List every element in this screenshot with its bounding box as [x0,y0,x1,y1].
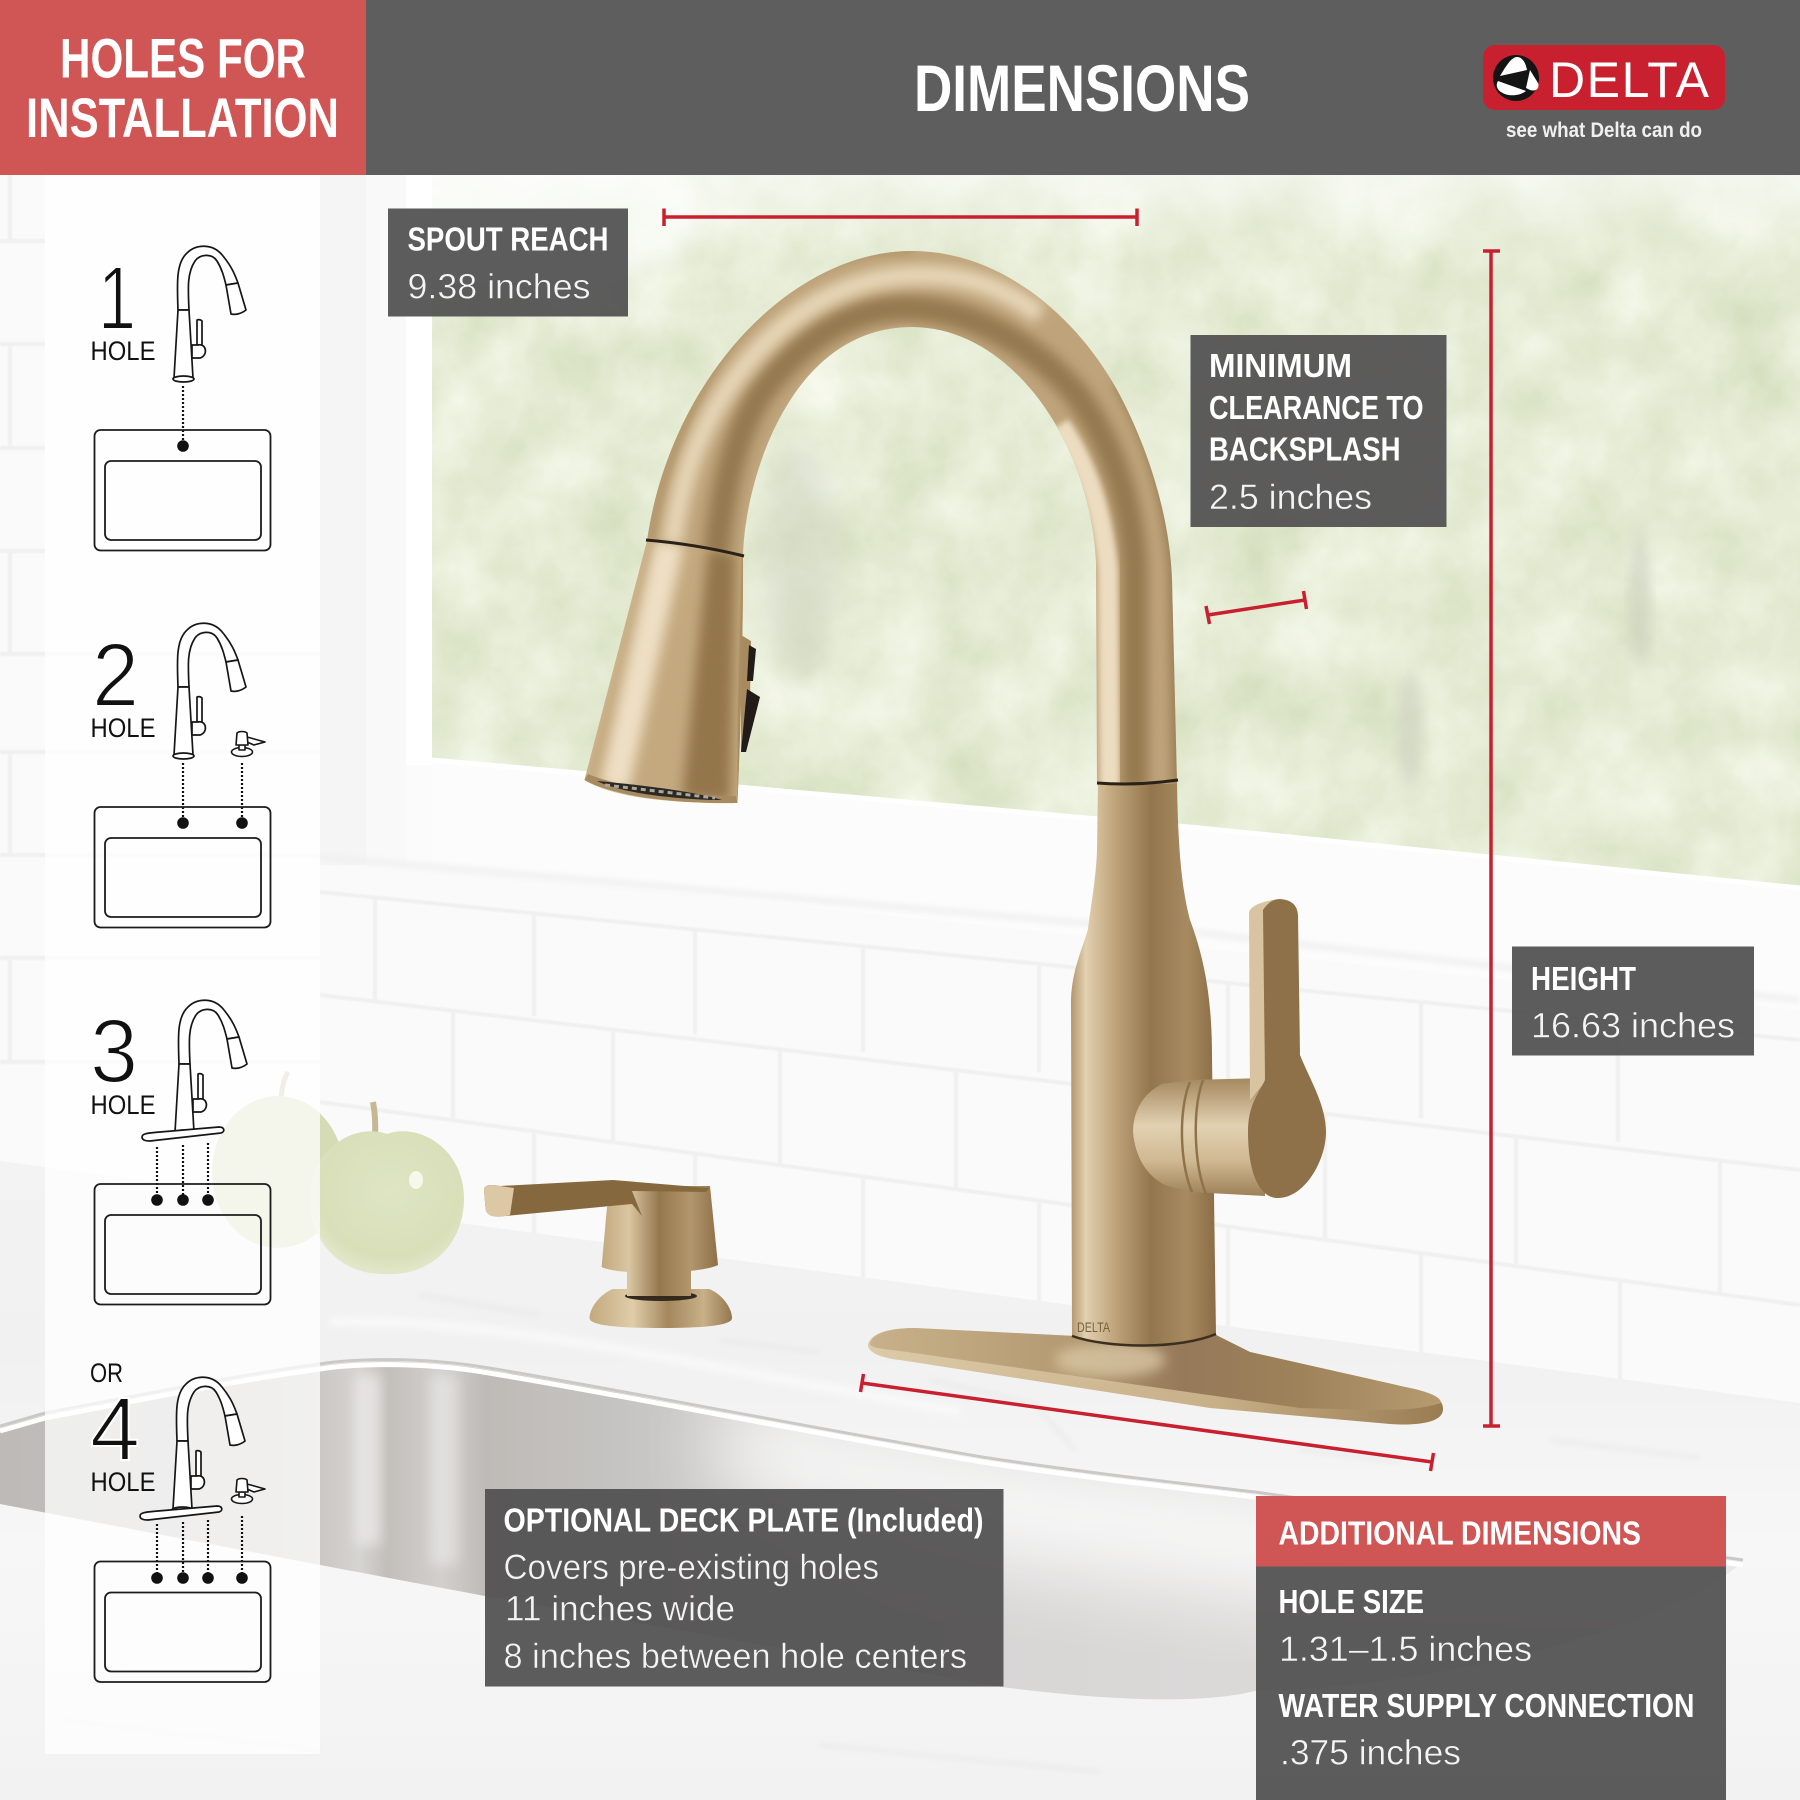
callout: minimum clearance [1190,335,1446,527]
handle lever [1249,899,1278,1100]
pull-down spray head [580,535,760,810]
title: dimensions: DIMENSIONS [914,51,1250,125]
dimension line: backsplash clearance [1206,591,1306,624]
dimension line: spout reach [664,208,1137,226]
callout: spout reach: 9.38 inches [408,268,590,306]
callout: minimum clearance: 2.5 inches [1209,478,1372,517]
4 hole option: 4 [90,1380,140,1480]
engraved DELTA mark: DELTA [1077,1319,1111,1335]
callout: optional deck plate: 8 inches between hole centers [504,1637,967,1676]
window sill [432,760,1800,1010]
additional dimensions heading: ADDITIONAL DIMENSIONS [1278,1514,1641,1552]
Delta logo [1483,45,1725,142]
callout: height: 16.63 inches [1531,1006,1735,1046]
back apple [212,1072,344,1248]
header tab: holes for installation [0,0,366,175]
header tab: holes for installation: HOLES FOR [60,26,306,90]
soap dispenser [484,1180,732,1328]
panel: additional dimensions: HOLE SIZE [1278,1583,1424,1620]
callout: height [1512,946,1754,1056]
callout: minimum clearance: BACKSPLASH [1209,430,1400,468]
handle hub [1133,1078,1265,1196]
wall [0,175,1800,1475]
window frame [320,175,432,865]
front apple [310,1102,464,1274]
callout: optional deck plate: Covers pre-existing holes [504,1548,879,1587]
header bar [366,0,1800,175]
3 hole option: 3 [90,1002,138,1102]
callout: optional deck plate [485,1489,1004,1686]
callout: minimum clearance: CLEARANCE TO [1209,389,1424,426]
left wall tile grout [0,175,320,1062]
deck plate [868,1328,1443,1424]
Delta logo: DELTA [1549,52,1710,108]
additional dimensions heading [1256,1496,1726,1566]
dimension line: deck plate width [860,1374,1434,1471]
neck seam [1097,780,1178,784]
panel: additional dimensions: .375 inches [1280,1734,1461,1772]
callout: minimum clearance: MINIMUM [1209,347,1352,384]
countertop [0,1161,1800,1800]
4 hole option: HOLE [90,1467,156,1497]
1 hole option: 1 [98,249,136,349]
subway tiles [320,892,1800,1382]
1 hole option: HOLE [90,336,156,366]
panel: holes for installation [45,175,320,1754]
gooseneck spout [630,240,1190,800]
marble veining [60,1295,1700,1772]
4 hole option [90,1358,270,1682]
2 hole option [90,623,270,928]
faucet [580,240,1326,1347]
2 hole option: HOLE [90,713,156,743]
panel: additional dimensions: WATER SUPPLY CONNECTION [1278,1687,1694,1724]
callout: optional deck plate: OPTIONAL DECK PLATE (Included) [504,1502,984,1538]
blurred garden view through window [432,175,1800,886]
callout: optional deck plate: 11 inches wide [505,1590,735,1628]
faucet body [1071,782,1216,1347]
3 hole option: HOLE [90,1090,156,1120]
header tab: holes for installation: INSTALLATION [26,86,339,149]
callout: spout reach [388,208,628,316]
panel: additional dimensions: 1.31–1.5 inches [1279,1630,1532,1669]
stainless sink [0,1358,1744,1700]
callout: height: HEIGHT [1531,960,1636,997]
Delta logo: see what Delta can do [1506,119,1702,142]
2 hole option: 2 [92,626,139,726]
panel: additional dimensions [1256,1496,1726,1800]
dimension line: height [1483,251,1500,1426]
3 hole option [90,1000,270,1304]
4 hole option: OR [90,1358,123,1388]
1 hole option [90,246,270,550]
callout: spout reach: SPOUT REACH [408,220,608,258]
